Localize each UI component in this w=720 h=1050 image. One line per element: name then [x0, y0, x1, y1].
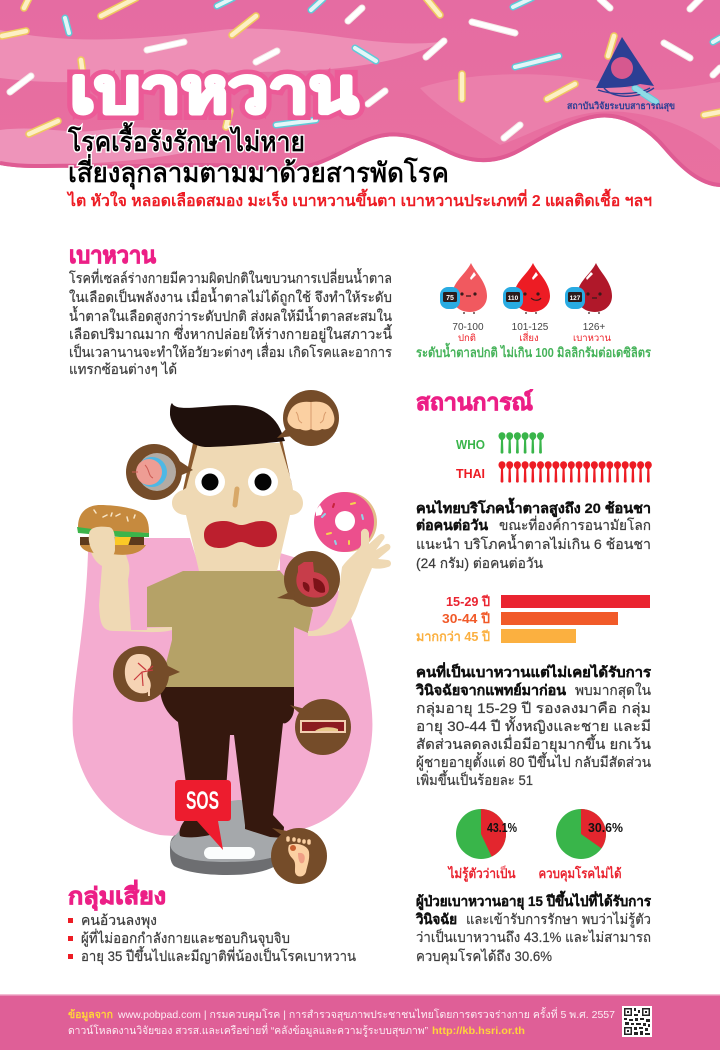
- text block: sugar consumption: ขณะที่องค์การอนามัยโลก: [499, 516, 651, 533]
- panel: definition: เบาหวาน: [69, 242, 156, 268]
- pie chart: uncontrolled 30.6%: 30.6%: [588, 821, 623, 835]
- bar chart: age groups: 15-29 ปี: [446, 594, 490, 609]
- icon: risk drop: 110: [508, 295, 519, 302]
- title: โรคเรื้อรังรักษาไม่หาย: [68, 122, 305, 157]
- panel: blood sugar levels: [416, 263, 651, 360]
- text block: sugar consumption: [416, 497, 651, 571]
- text block: treatment: วินิจฉัย: [415, 911, 457, 927]
- title: เบาหวาน: [70, 57, 358, 126]
- panel: definition: แทรกซ้อนต่างๆ ได้: [69, 361, 177, 377]
- bar chart: age groups: [416, 594, 650, 644]
- heading: situation: สถานการณ์: [416, 389, 533, 415]
- callout: SOS: [175, 780, 231, 850]
- text block: treatment: และเข้ารับการรักษา พบว่าไม่รู้ตัว: [466, 911, 651, 928]
- eyes: [195, 468, 225, 496]
- panel: definition: น้ำตาลในเลือดสูงกว่าระดับปกติ ส่งผลให้มีน้ำตาลสะสมใน: [69, 306, 392, 325]
- footer: [0, 994, 720, 1050]
- text block: sugar consumption: แนะนำ บริโภคน้ำตาลไม่เกิน 6 ช้อนชา: [416, 534, 651, 552]
- neck and face: [172, 443, 303, 571]
- shirt: [147, 571, 313, 687]
- footer: ดาวน์โหลดงานวิจัยของ สวรส.และเครือข่ายที่ “คลังข้อมูลและความรู้ระบบสุขภาพ”: [68, 1023, 428, 1037]
- panel: risk groups: [68, 879, 356, 965]
- pie chart: uncontrolled 30.6%: ควบคุมโรคไม่ได้: [538, 865, 622, 882]
- donut: [314, 492, 377, 552]
- title: ไต หัวใจ หลอดเลือดสมอง มะเร็ง เบาหวานขึ้นตา เบาหวานประเภทที่ 2 แผลติดเชื้อ ฯลฯ: [66, 188, 652, 210]
- panel: risk groups: ผู้ที่ไม่ออกกำลังกายและชอบกินจุบจิบ: [81, 929, 290, 947]
- panel: blood sugar levels: 70-100: [452, 322, 484, 333]
- text block: undiagnosed: ผู้ชายอายุตั้งแต่ 80 ปีขึ้นไป กลับมีสัดส่วน: [416, 752, 651, 771]
- bar chart: age groups: 30-44 ปี: [442, 611, 490, 626]
- icon: diabetes drop: [565, 263, 612, 314]
- icon: artery bubble: [290, 699, 351, 755]
- callout: SOS: SOS: [186, 787, 219, 815]
- pie chart: uncontrolled 30.6%: [538, 809, 623, 882]
- title: [66, 57, 652, 210]
- icon: heart bubble: [277, 551, 340, 607]
- logo: สถาบันวิจัยระบบสาธารณสุข: [567, 101, 675, 112]
- text block: undiagnosed: อายุ 30-44 ปี ทั้งหญิงและชาย และมี: [416, 716, 651, 735]
- icon: foot bubble: [271, 828, 327, 884]
- text block: undiagnosed: กลุ่มอายุ 15-29 ปี รองลงมาคือ กลุ่ม: [416, 700, 651, 717]
- burger: [77, 505, 149, 561]
- icon: risk drop: [503, 263, 550, 314]
- text block: treatment: ว่าเป็นเบาหวานถึง 43.1% และไม่สามารถ: [416, 928, 651, 945]
- text block: sugar consumption: ต่อคนต่อวัน: [416, 517, 488, 533]
- footer: http://kb.hsri.or.th: [432, 1025, 525, 1037]
- right arm and hand: [308, 529, 391, 636]
- text block: undiagnosed: สัดส่วนลดลงเมื่อมีอายุมากขึ้น ยกเว้น: [416, 734, 651, 753]
- bar chart: age groups: มากกว่า 45 ปี: [416, 629, 490, 644]
- panel: blood sugar levels: ระดับน้ำตาลปกติ ไม่เกิน 100 มิลลิกรัมต่อเดซิลิตร: [416, 342, 651, 360]
- chart: sugar spoons: WHO: [456, 438, 485, 452]
- icon: diabetes drop: 127: [570, 295, 581, 302]
- panel: definition: เป็นเวลานานจะทำให้อวัยวะต่างๆ เสื่อม เกิดโรคและอาการ: [69, 343, 392, 360]
- hair: [183, 440, 293, 490]
- panel: definition: [69, 242, 392, 377]
- panel: risk groups: คนอ้วนลงพุง: [81, 912, 157, 929]
- pie chart: unaware 43.1%: [447, 809, 517, 882]
- left arm and hand: [89, 527, 172, 632]
- panel: blood sugar levels: เบาหวาน: [573, 333, 612, 344]
- panel: risk groups: อายุ 35 ปีขึ้นไปและมีญาติพี่น้องเป็นโรคเบาหวาน: [81, 946, 356, 965]
- text block: undiagnosed: [415, 662, 651, 788]
- text block: treatment: ควบคุมโรคได้ถึง 30.6%: [416, 948, 552, 965]
- text block: treatment: [415, 890, 651, 965]
- icon: normal drop: [440, 263, 487, 314]
- QR code: [622, 1006, 652, 1037]
- text block: undiagnosed: พบมากสุดใน: [575, 682, 651, 699]
- panel: definition: เลือดปริมาณมาก ซึ่งหากปล่อยให้ร่างกายอยู่ในสภาวะนี้: [69, 324, 392, 343]
- panel: blood sugar levels: 101-125: [512, 322, 549, 333]
- pie chart: unaware 43.1%: ไม่รู้ตัวว่าเป็น: [447, 864, 516, 882]
- nose: [235, 489, 237, 505]
- mouth: [204, 521, 277, 548]
- icon: brain bubble: [277, 390, 339, 446]
- trousers: [160, 687, 294, 838]
- footer: ข้อมูลจาก: [68, 1008, 113, 1022]
- pink body blob: [73, 538, 372, 836]
- footer: www.pobpad.com | กรมควบคุมโรค | การสำรวจสุขภาพประชาชนไทยโดยการตรวจร่างกาย ครั้งที่ 5 พ.ศ. 2557: [117, 1007, 615, 1021]
- title: โรคเรื้อรังรักษาไม่หาย: [68, 122, 305, 157]
- text block: undiagnosed: วินิจฉัยจากแพทย์มาก่อน: [415, 682, 566, 698]
- icon: eye bubble: [126, 444, 193, 500]
- icon: normal drop: 75: [446, 295, 454, 302]
- title: เสี่ยงลุกลามตามมาด้วยสารพัดโรค: [68, 154, 449, 190]
- title: เบาหวาน: [70, 57, 358, 126]
- scale: [170, 800, 285, 875]
- illustration: man with complications: [73, 390, 391, 884]
- logo: [567, 37, 675, 112]
- panel: risk groups: กลุ่มเสี่ยง: [68, 879, 166, 911]
- panel: definition: โรคที่เซลล์ร่างกายมีความผิดปกติในขบวนการเปลี่ยนน้ำตาล: [69, 268, 392, 286]
- chart: sugar spoons: THAI: [456, 467, 485, 481]
- sprinkles: [2, 0, 720, 138]
- chart: sugar spoons: [456, 432, 652, 483]
- text block: sugar consumption: (24 กรัม) ต่อคนต่อวัน: [416, 555, 543, 571]
- title: เสี่ยงลุกลามตามมาด้วยสารพัดโรค: [68, 154, 449, 190]
- pie chart: unaware 43.1%: 43.1%: [487, 821, 517, 835]
- panel: blood sugar levels: 126+: [583, 322, 605, 333]
- panel: blood sugar levels: เสี่ยง: [519, 331, 539, 344]
- text block: treatment: ผู้ป่วยเบาหวานอายุ 15 ปีขึ้นไปที่ได้รับการ: [416, 890, 651, 910]
- panel: blood sugar levels: ปกติ: [458, 333, 476, 344]
- panel: definition: ในเลือดเป็นพลังงาน เมื่อน้ำตาลไม่ได้ถูกใช้ จึงทำให้ระดับ: [69, 287, 392, 306]
- header: pink icing with drips: [0, 0, 720, 187]
- text block: sugar consumption: คนไทยบริโภคน้ำตาลสูงถึง 20 ช้อนชา: [416, 497, 651, 517]
- icon: kidney bubble: [113, 646, 180, 702]
- text block: undiagnosed: คนที่เป็นเบาหวานแต่ไม่เคยได้รับการ: [416, 662, 651, 680]
- text block: undiagnosed: เพิ่มขึ้นเป็นร้อยละ 51: [416, 770, 533, 788]
